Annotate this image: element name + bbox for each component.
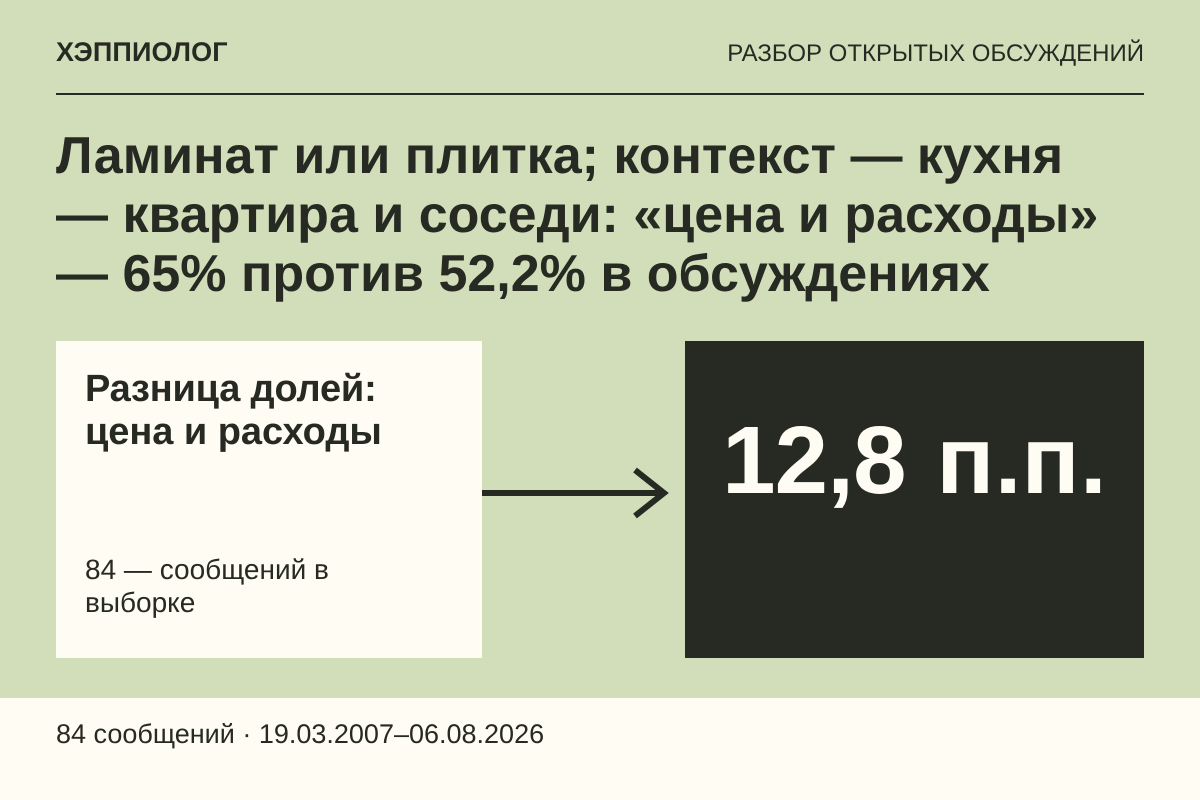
footer band [0, 698, 1200, 800]
brand name: ХЭППИОЛОГ [56, 37, 228, 67]
title: Ламинат или плитка; контекст — кухня [56, 127, 1063, 185]
sample size note [85, 554, 329, 618]
footer text: 84 сообщений · 19.03.2007–06.08.2026 [56, 719, 544, 749]
title: — 65% против 52,2% в обсуждениях [56, 245, 990, 303]
sample size note: выборке [85, 587, 195, 618]
panel heading: цена и расходы [85, 411, 382, 453]
panel heading [85, 368, 382, 453]
panel heading: Разница долей: [85, 368, 377, 410]
header caption: РАЗБОР ОТКРЫТЫХ ОБСУЖДЕНИЙ [727, 40, 1144, 67]
sample size note: 84 — сообщений в [85, 554, 329, 585]
panel: key value [685, 341, 1144, 658]
arrow [482, 468, 669, 518]
title [56, 127, 1098, 303]
header rule [56, 93, 1144, 95]
panel: metric description [56, 341, 482, 658]
title: — квартира и соседи: «цена и расходы» [56, 186, 1098, 244]
big number: 12,8 п.п. [722, 407, 1107, 514]
